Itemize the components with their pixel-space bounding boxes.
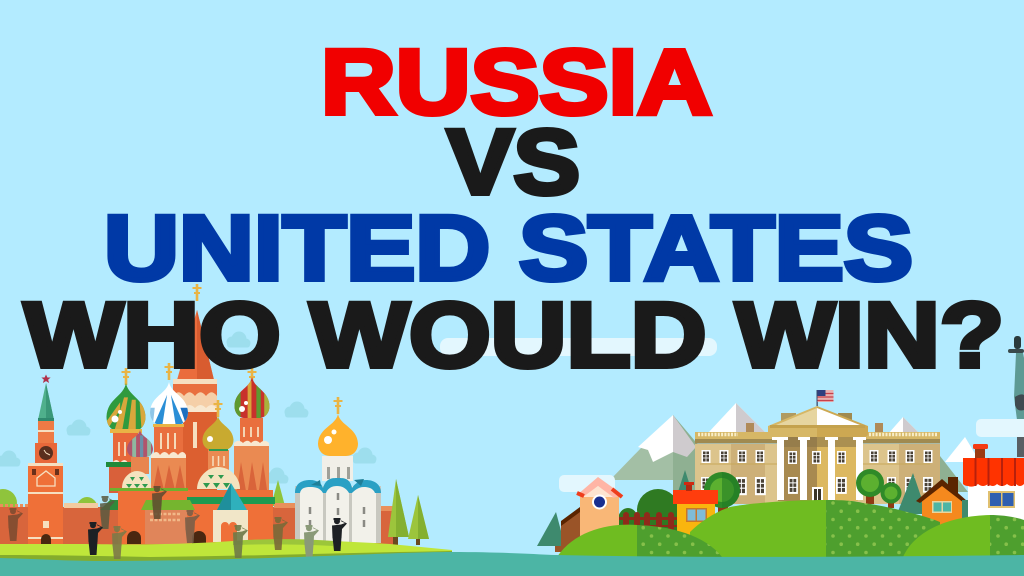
pale cloud left — [559, 475, 615, 492]
Kremlin wall — [0, 503, 393, 545]
pale cloud right — [976, 419, 1024, 437]
cathedral front blocks — [100, 488, 275, 544]
title line: Russia: RUSSIA — [321, 32, 712, 134]
pine far left — [537, 512, 565, 546]
round trees right — [856, 469, 902, 508]
bushes behind wall — [0, 489, 98, 523]
statue of liberty — [1008, 336, 1024, 457]
title — [24, 32, 1004, 386]
small teal roofed gate — [213, 483, 248, 542]
gold onion tower — [197, 400, 240, 489]
snowy mountains — [610, 403, 980, 520]
title line: vs: VS — [447, 112, 580, 214]
blue and white onion tower — [150, 363, 188, 493]
fir trees — [388, 479, 429, 545]
orange house — [916, 477, 967, 525]
small purple onion dome — [122, 430, 153, 488]
fence — [619, 512, 677, 540]
title line: United States: UNITED STATES — [104, 198, 913, 300]
US flag — [816, 390, 834, 406]
left house — [555, 477, 623, 552]
green hills — [557, 500, 1024, 558]
Spasskaya clock tower — [28, 374, 63, 544]
big round tree — [704, 472, 740, 519]
left green and gold onion tower — [106, 368, 146, 493]
red roof house — [962, 444, 1024, 524]
small tree by church — [271, 480, 285, 506]
white church with orange dome — [295, 397, 393, 544]
pine right — [897, 473, 927, 514]
lawn — [0, 539, 452, 562]
yellow house — [673, 482, 718, 537]
bushes — [618, 489, 679, 540]
St Basil main tower — [173, 284, 217, 500]
title line: Who would win: WHO WOULD WIN? — [24, 284, 1004, 386]
teal water strip — [0, 552, 1024, 576]
pale clouds, Russia side — [0, 332, 376, 484]
small pine — [678, 470, 692, 492]
white cloud behind title — [440, 338, 717, 356]
right red and green onion tower — [234, 368, 270, 501]
white house — [695, 406, 940, 504]
saluting soldiers — [8, 486, 347, 559]
USA scene — [537, 336, 1024, 558]
Russia scene — [0, 284, 452, 562]
